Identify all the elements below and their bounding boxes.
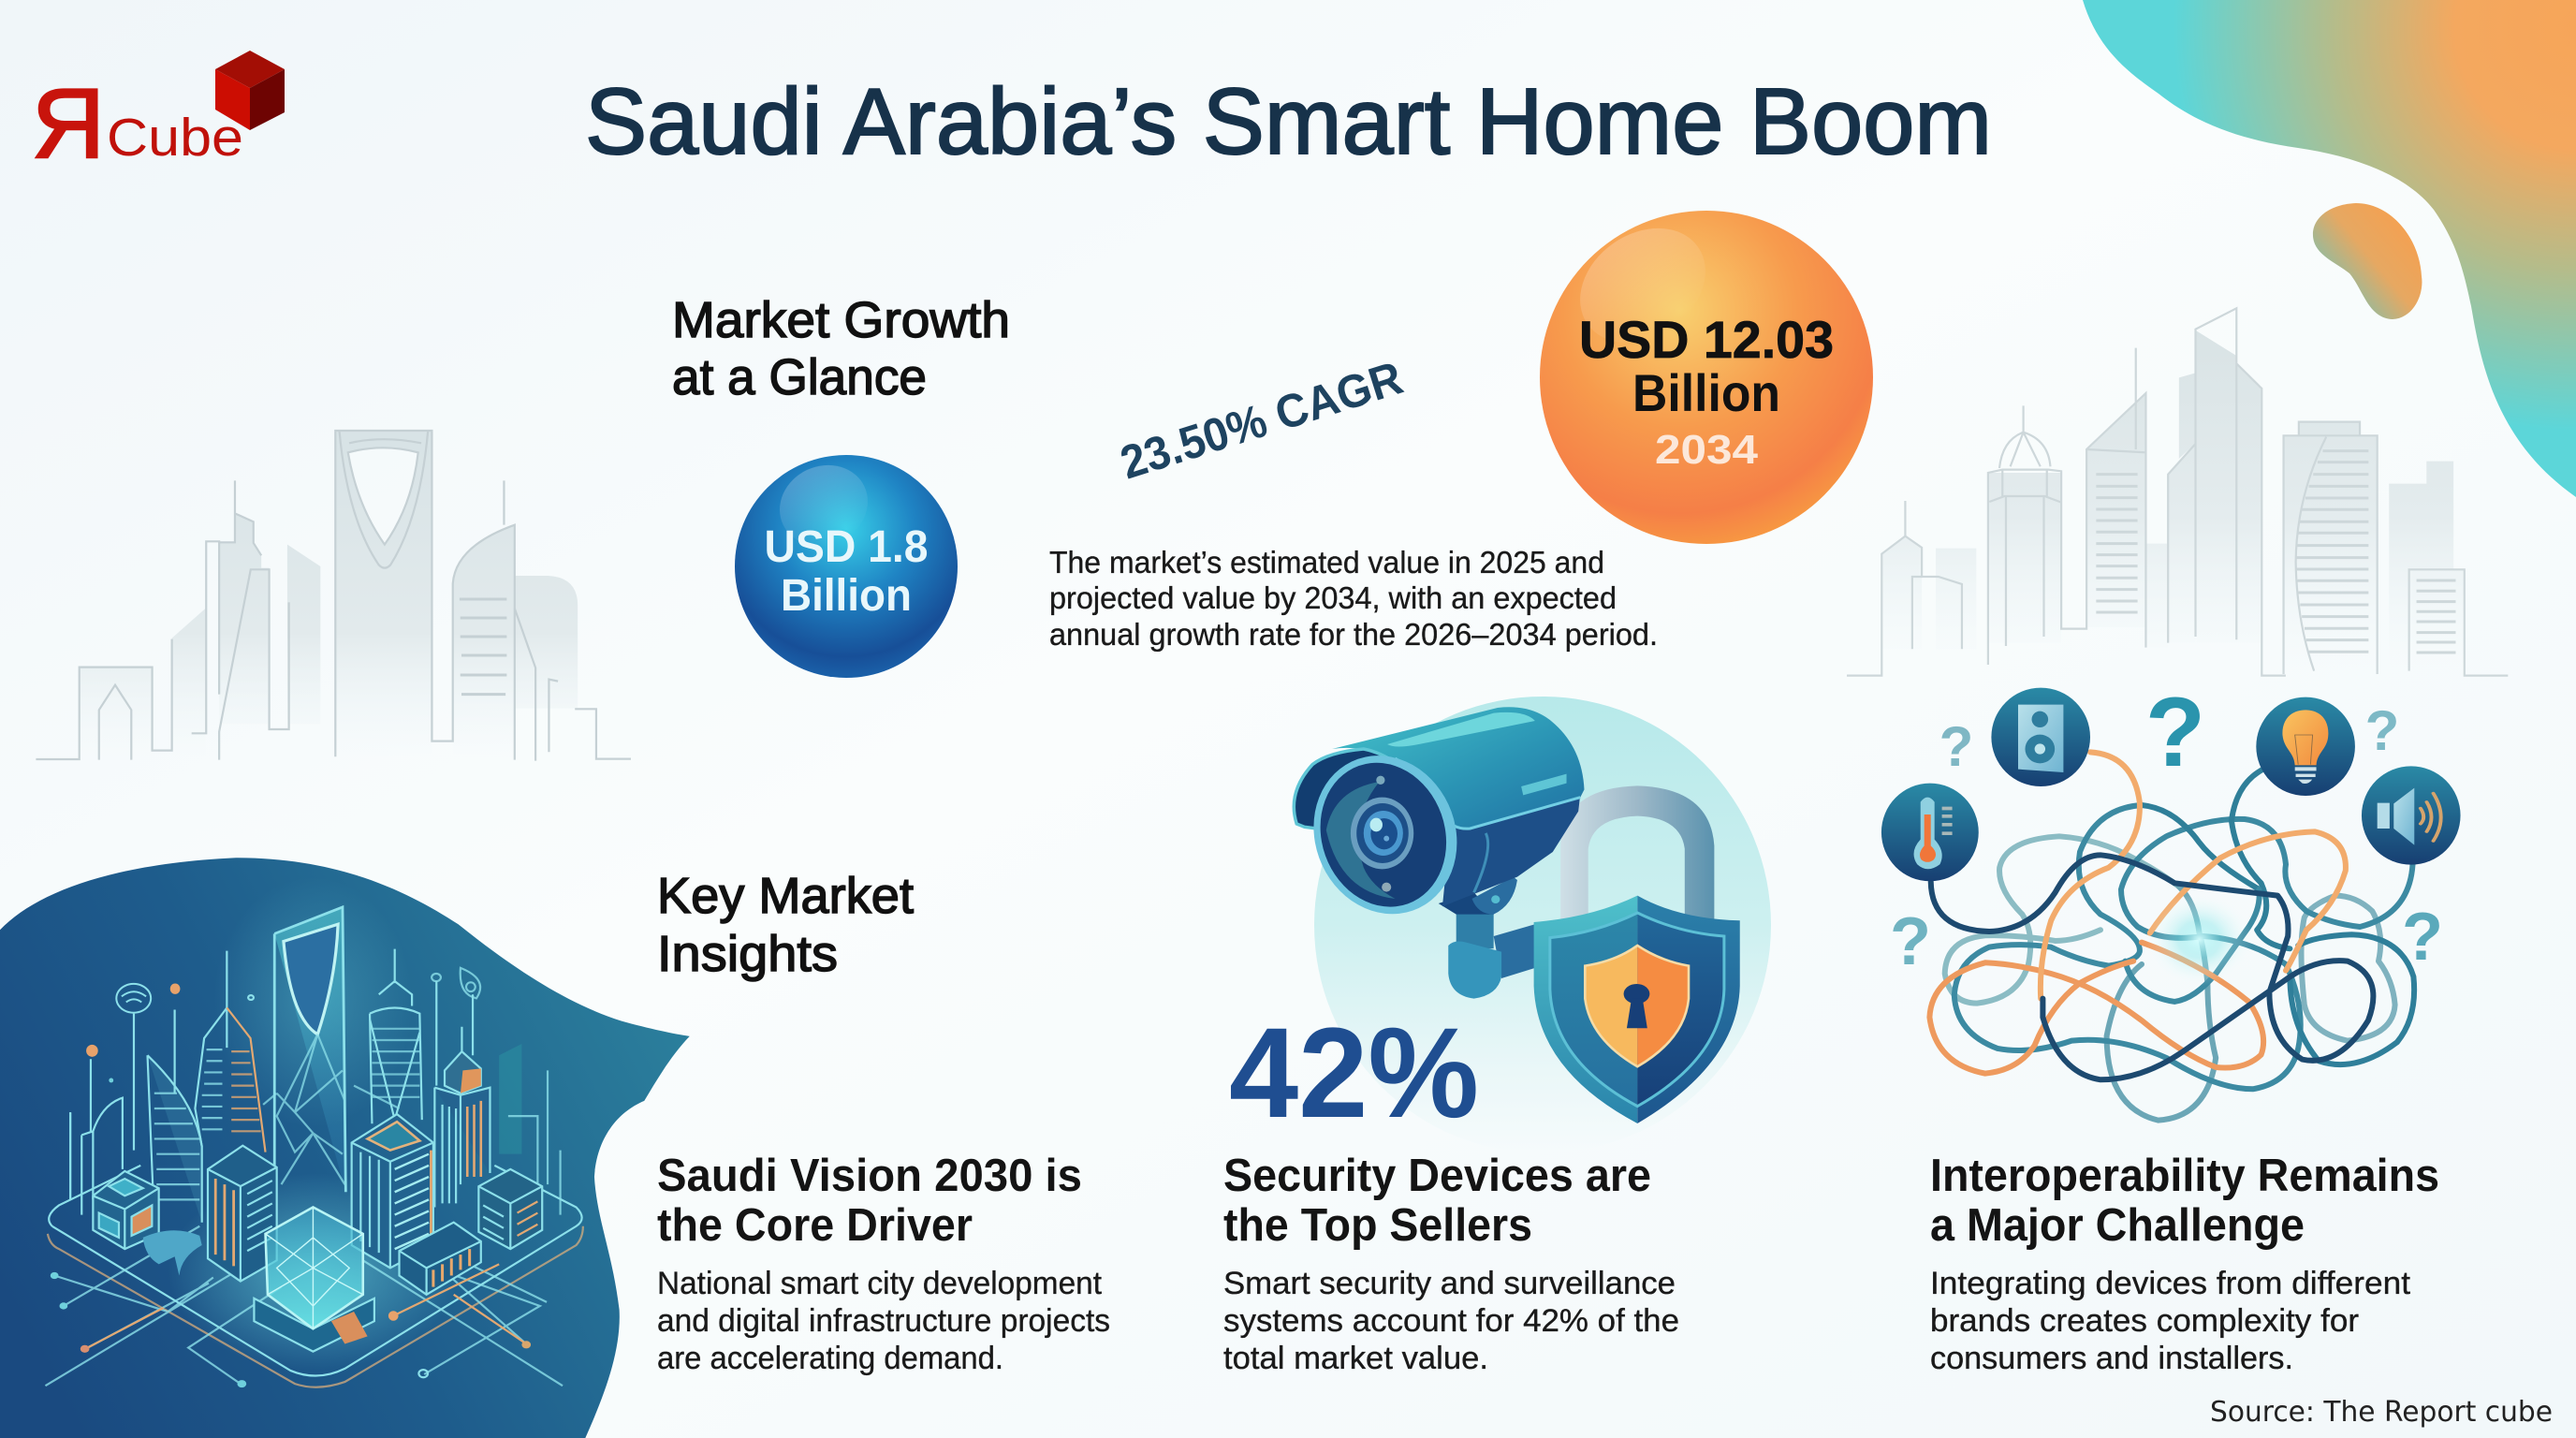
section heading: market growth: Market Growth (672, 292, 1010, 348)
2034 value text: USD 12.03 (1579, 310, 1834, 369)
section heading: market growth (672, 292, 1010, 405)
city backdrop shape (0, 858, 690, 1438)
2025 value text (764, 522, 929, 621)
insight body: consumers and installers. (1930, 1341, 2293, 1376)
question marks: ? (2365, 699, 2399, 762)
insight body (1930, 1266, 2411, 1376)
insight heading (1930, 1151, 2439, 1251)
camera barrel (1332, 707, 1584, 829)
icon: speaker (1991, 688, 2090, 786)
decorative droplet (2313, 203, 2422, 319)
stat: 42 percent: 42% (1229, 1002, 1479, 1145)
tangled wires (1929, 752, 2414, 1121)
section heading: key insights: Key Market (657, 868, 914, 924)
camera underbody (1442, 794, 1580, 906)
logo cube (215, 51, 285, 130)
insight heading: Interoperability Remains (1930, 1151, 2439, 1201)
camera and lock (1294, 707, 1740, 1123)
camera hood (1294, 749, 1435, 830)
insight heading (1223, 1151, 1651, 1251)
question marks (1890, 678, 2443, 979)
2034 value text: Billion (1632, 363, 1780, 422)
insight body: Smart security and surveillance (1223, 1266, 1676, 1301)
insight body: total market value. (1223, 1341, 1488, 1376)
decorative blob: top right (2083, 0, 2576, 497)
source note: Source: The Report cube (2210, 1396, 2553, 1429)
insight: vision 2030 (657, 1151, 1110, 1376)
icon: security camera and padlock (1294, 697, 1771, 1153)
camera lens (1301, 748, 1470, 921)
market description (1049, 545, 1658, 652)
2034 value text: 2034 (1655, 427, 1759, 473)
2025 value text: Billion (781, 571, 912, 621)
CAGR label: 23.50% CAGR (1114, 351, 1409, 489)
insight heading: the Top Sellers (1223, 1200, 1532, 1251)
city node dots (51, 984, 531, 1387)
skyline: right (1847, 308, 2508, 676)
insight body: Integrating devices from different (1930, 1266, 2411, 1301)
insight heading: the Core Driver (657, 1200, 973, 1251)
2025 value text: USD 1.8 (764, 522, 929, 572)
2034 value text (1579, 310, 1834, 473)
panel: vision 2030 city illustration (0, 858, 690, 1438)
insight: security devices (1223, 1151, 1679, 1376)
icon: light bulb (2256, 697, 2355, 796)
question marks: ? (1890, 904, 1931, 979)
market description: projected value by 2034, with an expected (1049, 580, 1617, 615)
padlock shackle (1560, 785, 1714, 920)
logo letter: Я (32, 69, 105, 179)
market description: annual growth rate for the 2026–2034 period. (1049, 617, 1658, 652)
insight heading: Security Devices are (1223, 1151, 1651, 1201)
shield (1534, 896, 1740, 1123)
icon: tangled device wires (1881, 678, 2461, 1121)
section heading: key insights: Insights (657, 926, 838, 982)
question marks: ? (2145, 678, 2205, 787)
insight body: and digital infrastructure projects (657, 1303, 1110, 1339)
icon backdrop circle (1314, 697, 1771, 1153)
section heading: market growth: at a Glance (672, 349, 927, 405)
logo: RCube (32, 51, 285, 179)
icon: sound (2362, 766, 2461, 865)
title: Saudi Arabia’s Smart Home Boom (585, 69, 1992, 174)
question marks: ? (1939, 715, 1973, 778)
insight heading (657, 1151, 1082, 1251)
insight heading: a Major Challenge (1930, 1200, 2305, 1251)
insight: interoperability (1930, 1151, 2439, 1376)
market description: The market’s estimated value in 2025 and (1049, 545, 1604, 580)
section heading: key insights (657, 868, 914, 982)
insight body: systems account for 42% of the (1223, 1303, 1679, 1339)
camera mount (1439, 877, 1537, 999)
insight body (657, 1266, 1110, 1376)
insight body: are accelerating demand. (657, 1341, 1003, 1376)
city illustration (45, 907, 583, 1387)
skyline: left (36, 431, 631, 761)
insight body: brands creates complexity for (1930, 1303, 2359, 1339)
2034 value bubble (1540, 205, 1873, 544)
icon: thermostat (1881, 784, 1979, 881)
insight heading: Saudi Vision 2030 is (657, 1151, 1082, 1201)
insight body (1223, 1266, 1679, 1376)
2025 value bubble (735, 451, 958, 678)
logo wordmark: Cube (107, 108, 243, 168)
question marks: ? (2402, 900, 2443, 975)
insight body: National smart city development (657, 1266, 1103, 1301)
